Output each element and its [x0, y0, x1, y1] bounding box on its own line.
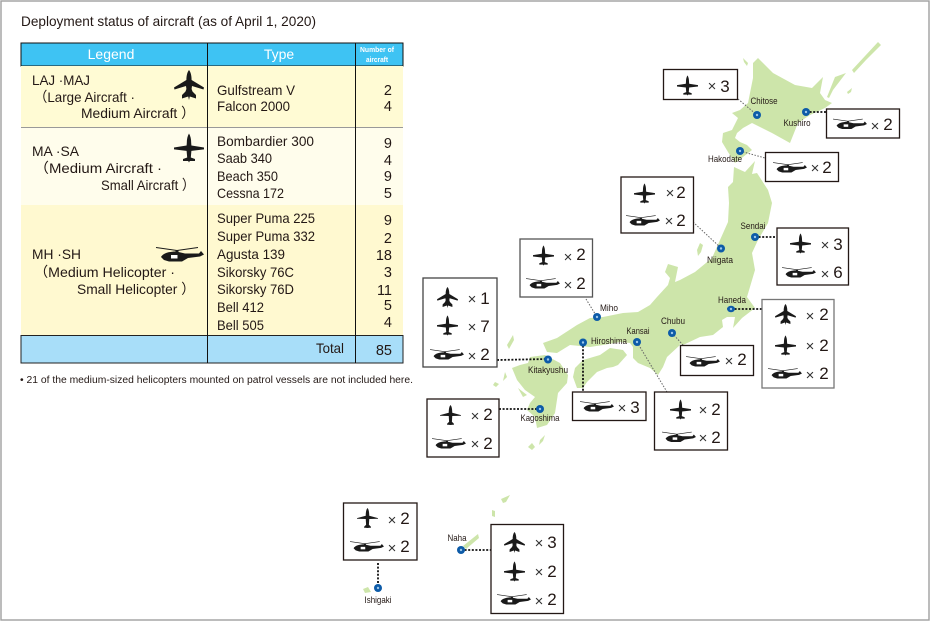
base: Hakodate: × [811, 160, 819, 177]
base: Kitakyushu: 1 [480, 289, 490, 308]
Shikoku [573, 348, 627, 388]
base: Kagoshima: × [471, 436, 479, 453]
base: Chubu: 2 [737, 350, 747, 369]
base: Chitose: Chitose [750, 96, 778, 107]
row: medium and small helicopters: Bell 505 [217, 317, 264, 333]
row: medium and small helicopters: 11 [377, 283, 392, 299]
base: Kushiro: 2 [883, 115, 893, 134]
base: Kansai: × [699, 402, 707, 419]
icon: medium aircraft [174, 134, 204, 162]
base: Kansai: 2 [711, 400, 721, 419]
base: Niigata: Niigata [707, 255, 734, 266]
icon: large aircraft [174, 70, 204, 100]
row: large and medium aircraft: Gulfstream V [217, 82, 296, 98]
base: Kitakyushu: × [468, 348, 476, 365]
row: large and medium aircraft: Medium Aircraft ） [81, 105, 195, 121]
base: Kitakyushu: 7 [480, 317, 490, 336]
base: Kitakyushu: × [468, 291, 476, 308]
Hokkaido [722, 58, 832, 163]
row: medium and small aircraft: 5 [384, 186, 392, 202]
base: Chitose [664, 70, 778, 119]
row: medium and small helicopters: 2 [384, 231, 392, 247]
row: medium and small aircraft: Beach 350 [217, 168, 278, 184]
base: Miho: 2 [576, 245, 586, 264]
Honshu [543, 161, 772, 375]
base: Niigata: 2 [676, 211, 686, 230]
base: Chubu: Chubu [661, 316, 685, 327]
base: Kitakyushu [423, 278, 568, 376]
icon: helicopter [156, 248, 204, 262]
base: Kitakyushu: × [468, 319, 476, 336]
base: Niigata: 2 [676, 183, 686, 202]
base: Naha: 2 [547, 590, 557, 609]
footnote: • 21 of the medium-sized helicopters mounted on patrol vessels are not included here. [20, 375, 413, 386]
base: Ishigaki: × [388, 512, 396, 529]
row: medium and small aircraft: 4 [384, 153, 392, 169]
base: Kushiro: × [871, 118, 879, 135]
row: total: Total [316, 340, 344, 356]
base: Chubu [661, 316, 754, 376]
title: Deployment status of aircraft (as of April 1, 2020) [21, 13, 316, 29]
base: Hiroshima: × [618, 400, 626, 417]
row: medium and small helicopters: Sikorsky 76D [217, 281, 294, 297]
base: Kansai: 2 [711, 428, 721, 447]
row: medium and small helicopters: 5 [384, 298, 392, 314]
base: Miho [520, 239, 618, 321]
row: large and medium aircraft: 4 [384, 99, 392, 115]
row: medium and small helicopters: （Medium Helicopter · [34, 264, 175, 280]
base: Haneda: Haneda [718, 295, 747, 306]
base: Kushiro [784, 108, 900, 138]
base: Naha [448, 524, 564, 614]
Kyushu [512, 355, 568, 428]
base: Kansai: Kansai [626, 326, 650, 337]
row: large and medium aircraft: 2 [384, 83, 392, 99]
base: Chubu: × [725, 353, 733, 370]
base: Sendai [740, 221, 848, 285]
row: medium and small aircraft: MA ·SA [32, 143, 80, 159]
base: Sendai: Sendai [740, 221, 766, 232]
row: total [21, 336, 403, 363]
row: large and medium aircraft: （Large Aircraft · [34, 89, 135, 105]
base: Sendai: 6 [833, 263, 843, 282]
row: large and medium aircraft: Falcon 2000 [217, 98, 290, 114]
base: Kagoshima: 2 [483, 434, 493, 453]
base: Hakodate: 2 [822, 158, 832, 177]
base: Kagoshima: × [471, 408, 479, 425]
row: total: 85 [376, 343, 392, 359]
row: medium and small helicopters [21, 205, 403, 335]
row: medium and small helicopters: MH ·SH [32, 246, 81, 262]
base: Kitakyushu: 2 [480, 345, 490, 364]
base: Kitakyushu: Kitakyushu [528, 365, 568, 376]
base: Haneda: × [806, 338, 814, 355]
base: Naha: Naha [448, 533, 467, 544]
table header: Legend [88, 46, 134, 62]
table header: aircraft [366, 57, 389, 64]
row: medium and small helicopters: Super Puma 225 [217, 210, 315, 226]
base: Haneda: × [806, 367, 814, 384]
base: Kansai [626, 326, 728, 450]
row: medium and small helicopters: 4 [384, 315, 392, 331]
base: Ishigaki: 2 [400, 509, 410, 528]
base: Ishigaki [344, 503, 417, 606]
base: Chitose: 3 [720, 77, 730, 96]
base: Sendai: 3 [833, 235, 843, 254]
base: Haneda: 2 [819, 364, 829, 383]
leader lines [378, 99, 826, 585]
base: Naha: × [535, 564, 543, 581]
base: Naha: 3 [547, 533, 557, 552]
row: medium and small aircraft: 9 [384, 136, 392, 152]
base: Hiroshima: 3 [630, 398, 640, 417]
row: medium and small helicopters: 3 [384, 265, 392, 281]
row: medium and small aircraft: Cessna 172 [217, 185, 284, 201]
base: Hakodate [708, 147, 838, 182]
base: Chitose: × [708, 78, 716, 95]
row: medium and small helicopters: 9 [384, 213, 392, 229]
islands [363, 42, 881, 593]
base: Miho: 2 [576, 274, 586, 293]
base: Haneda: × [806, 308, 814, 325]
row: medium and small aircraft: Saab 340 [217, 150, 272, 166]
base: Sendai: × [821, 266, 829, 283]
row: medium and small aircraft: （Medium Aircraft · [34, 160, 162, 176]
row: large and medium aircraft [21, 66, 403, 127]
table header: Number of [360, 47, 395, 54]
base: Niigata: × [666, 185, 674, 202]
base: Naha: × [535, 593, 543, 610]
base: Miho: × [564, 277, 572, 294]
row: medium and small helicopters: Super Puma 332 [217, 228, 315, 244]
base: Ishigaki: 2 [400, 537, 410, 556]
base: Haneda: 2 [819, 336, 829, 355]
base: Hakodate: Hakodate [708, 154, 742, 165]
row: medium and small aircraft [21, 127, 403, 205]
base: Miho: × [564, 249, 572, 266]
base: Ishigaki: × [388, 540, 396, 557]
base: Sendai: × [821, 237, 829, 254]
base: Kagoshima [427, 399, 560, 457]
base: Haneda [718, 295, 834, 388]
row: medium and small helicopters: 18 [376, 248, 392, 264]
row: medium and small helicopters: Small Helicopter ） [77, 281, 195, 297]
base: Hiroshima [572, 336, 646, 420]
base: Naha: × [535, 535, 543, 552]
table: deployment by aircraft type [21, 43, 403, 363]
base: Kagoshima: Kagoshima [520, 413, 560, 424]
base: Miho: Miho [600, 303, 618, 314]
base: Niigata: × [665, 213, 673, 230]
base: Naha: 2 [547, 562, 557, 581]
base: Haneda: 2 [819, 305, 829, 324]
table header [21, 43, 403, 66]
row: medium and small helicopters: Sikorsky 76C [217, 264, 294, 280]
table header: Type [264, 46, 294, 62]
row: medium and small helicopters: Bell 412 [217, 299, 264, 315]
base: Niigata [621, 177, 734, 266]
base: Hiroshima: Hiroshima [591, 336, 628, 347]
base: Kushiro: Kushiro [784, 118, 810, 129]
row: large and medium aircraft: LAJ ·MAJ [32, 72, 90, 88]
base: Kagoshima: 2 [483, 405, 493, 424]
base: Ishigaki: Ishigaki [364, 595, 392, 606]
row: medium and small aircraft: Bombardier 300 [217, 133, 314, 149]
row: medium and small helicopters: Agusta 139 [217, 246, 285, 262]
base: Kansai: × [699, 430, 707, 447]
row: medium and small aircraft: Small Aircraft ） [101, 177, 195, 193]
map of Japan [363, 42, 881, 593]
row: medium and small aircraft: 9 [384, 169, 392, 185]
